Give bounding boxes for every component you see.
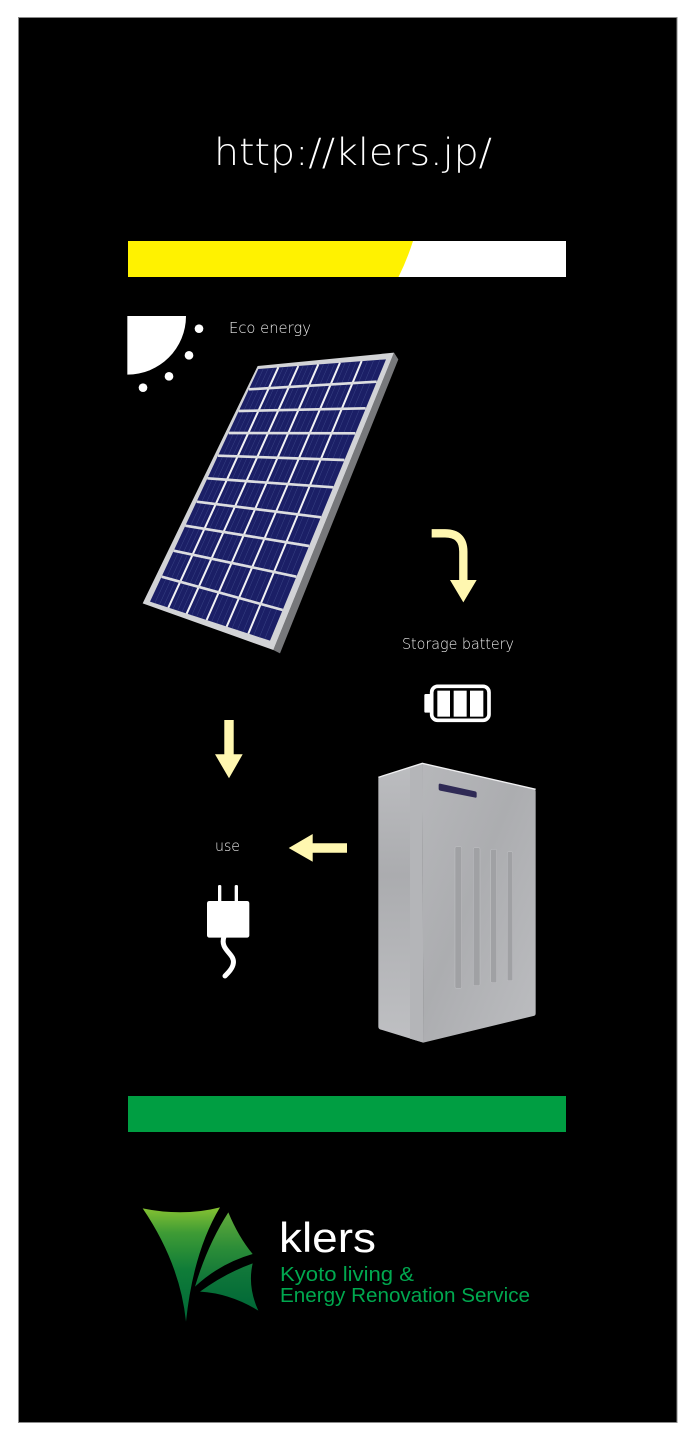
- logo tagline: Energy Renovation Service: [280, 1285, 530, 1307]
- row separators: [162, 382, 377, 610]
- panel cells: [150, 359, 386, 641]
- icon: battery: [424, 686, 489, 720]
- icon: plug: [207, 885, 249, 976]
- logo tagline: [280, 1264, 530, 1307]
- label: use: use: [215, 837, 240, 855]
- arrow: battery to use: [289, 834, 347, 862]
- box front face: [422, 763, 536, 1043]
- logo tagline: Kyoto living &: [280, 1264, 415, 1286]
- box side face: [378, 763, 423, 1043]
- bottom green bar: [128, 1096, 566, 1132]
- cell stripes: [155, 360, 380, 639]
- storage battery unit: [378, 763, 536, 1043]
- url heading: http://klers.jp/: [214, 131, 492, 174]
- logo wordmark: klers: [279, 1214, 376, 1261]
- label: storage battery: Storage battery: [402, 635, 514, 653]
- label: eco energy: Eco energy: [229, 319, 311, 337]
- panel side edge: [273, 353, 398, 653]
- solar panel: [143, 353, 398, 653]
- panel frame: [143, 353, 394, 650]
- box display: [439, 784, 477, 798]
- column separators: [168, 361, 362, 634]
- box corner fold: [410, 763, 423, 1043]
- icon: sun: [127, 316, 203, 392]
- arrow: panel to battery: [432, 533, 477, 602]
- arrow: panel to use: [215, 720, 243, 778]
- top bar: yellow and white: [128, 241, 566, 277]
- box vents: [455, 847, 513, 988]
- box top highlight: [378, 763, 536, 789]
- logo mark: [143, 1207, 258, 1322]
